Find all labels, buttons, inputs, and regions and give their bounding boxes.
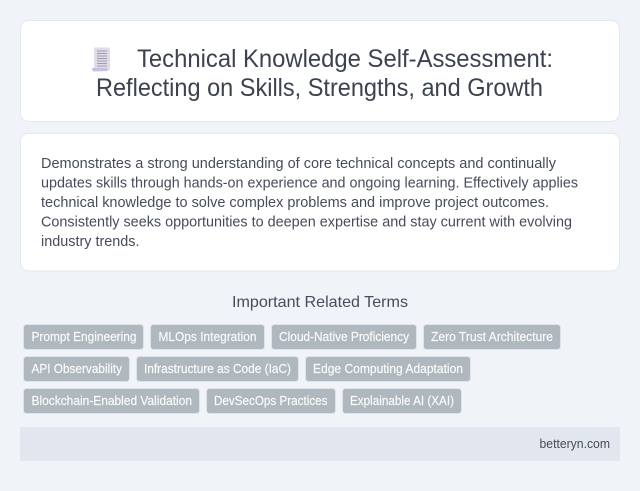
text block: description: Consistently seeks opportunities to deepen expertise and stay current with evolving	[41, 214, 572, 230]
tag: API Observability	[32, 362, 123, 376]
tag: Zero Trust Architecture	[431, 330, 553, 344]
tag: MLOps Integration	[158, 330, 257, 344]
tag	[150, 324, 264, 350]
title	[96, 45, 553, 102]
text block: description: technical knowledge to solve complex problems and improve project outcomes.	[41, 195, 549, 211]
tag: Edge Computing Adaptation	[313, 362, 463, 376]
text block: description: updates skills through hands-on experience and ongoing learning. Effectively applies	[41, 176, 578, 192]
tag	[206, 388, 336, 414]
panel: description	[20, 134, 620, 271]
tag: Infrastructure as Code (IaC)	[144, 362, 291, 376]
title: Reflecting on Skills, Strengths, and Growth	[96, 74, 543, 102]
tag	[272, 324, 416, 350]
tag: Cloud-Native Proficiency	[279, 330, 410, 344]
tag: DevSecOps Practices	[214, 394, 328, 408]
title: Technical Knowledge Self-Assessment:	[137, 45, 553, 73]
tag	[342, 388, 462, 414]
tag: Blockchain-Enabled Validation	[32, 394, 192, 408]
tag	[24, 324, 144, 350]
tag	[424, 324, 560, 350]
icon: receipt scroll	[92, 48, 110, 72]
tag	[24, 356, 130, 382]
tag: Prompt Engineering	[32, 330, 137, 344]
heading: important related terms: Important Related Terms	[232, 294, 408, 311]
text block: description: Demonstrates a strong understanding of core technical concepts and continually	[41, 156, 557, 172]
tag list	[24, 324, 560, 414]
text block: description	[41, 156, 578, 250]
panel: title card	[20, 20, 620, 122]
footer bar	[20, 427, 620, 461]
text block: description: industry trends.	[41, 234, 140, 250]
tag: Explainable AI (XAI)	[350, 394, 454, 408]
tag	[24, 388, 200, 414]
tag	[136, 356, 298, 382]
footer: site name: betteryn.com	[540, 437, 610, 451]
tag	[306, 356, 470, 382]
